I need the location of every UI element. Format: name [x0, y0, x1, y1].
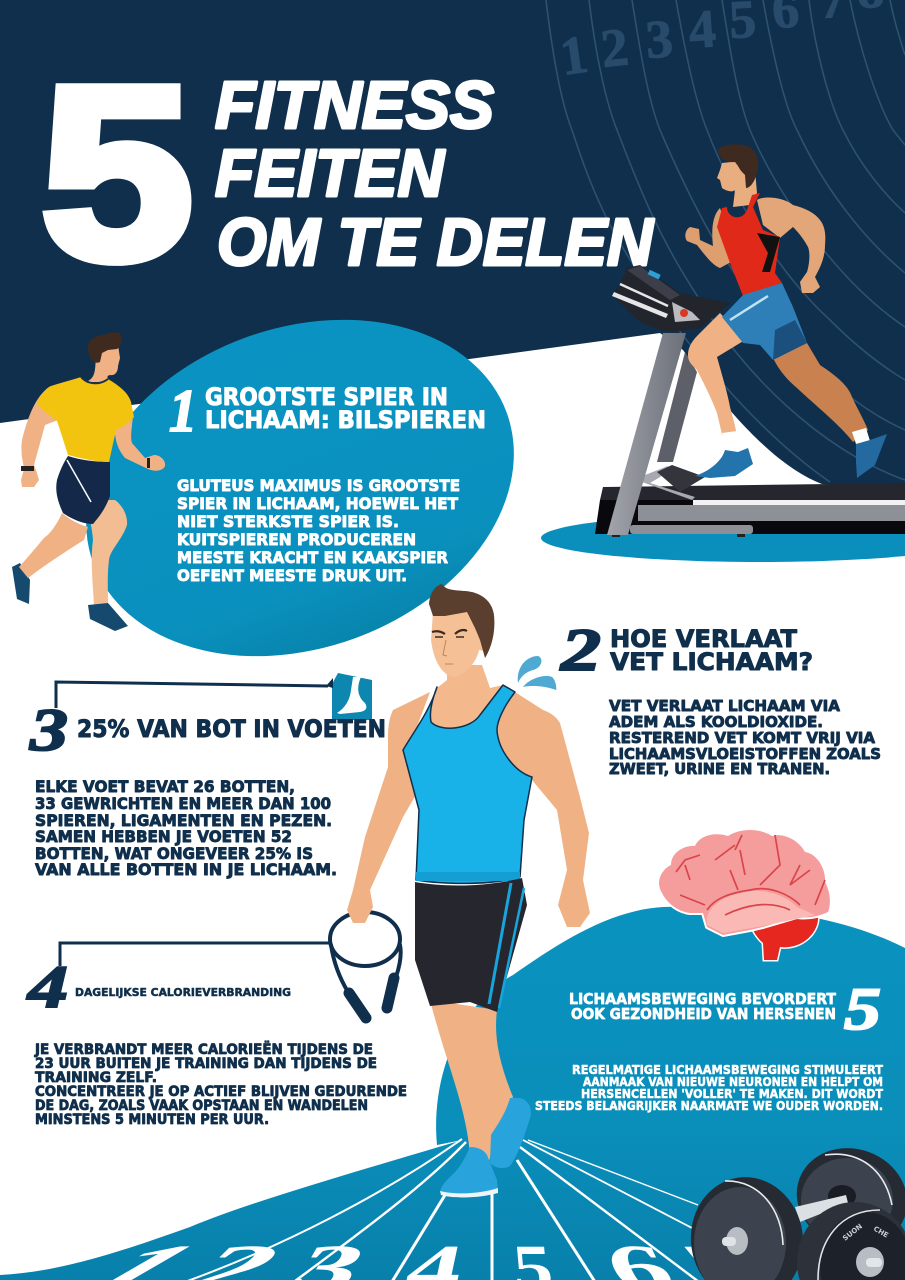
fact 1 body text: KUITSPIEREN PRODUCEREN	[177, 530, 416, 549]
runner in yellow shirt	[12, 332, 165, 631]
fact 5 heading: LICHAAMSBEWEGING BEVORDERT	[569, 990, 837, 1008]
front leg	[688, 313, 745, 437]
hair	[717, 144, 758, 188]
fact 5 body text: STEEDS BELANGRIJKER NAARMATE WE OUDER WORDEN.	[535, 1099, 883, 1113]
fact 4 body text: TRAINING ZELF.	[35, 1070, 157, 1086]
fact 2 heading: VET LICHAAM?	[610, 648, 813, 676]
decorative lane numbers in header: 4	[687, 0, 718, 60]
yellow t-shirt	[37, 377, 134, 462]
fact 1 heading: GROOTSTE SPIER IN	[205, 383, 448, 411]
cerebrum	[659, 830, 830, 935]
fact 1 body text: MEESTE KRACHT EN KAAKSPIER	[177, 548, 448, 567]
head and neck	[717, 160, 757, 207]
left arm	[347, 692, 430, 923]
title: FITNESS FEITEN OM TE DELEN	[214, 80, 656, 267]
neck and chest	[425, 665, 503, 740]
treadmill rear upright	[657, 352, 697, 462]
fact 2 body text: RESTEREND VET KOMT VRIJ VIA	[609, 729, 875, 747]
back leg	[19, 513, 88, 578]
fact 3 body text: ELKE VOET BEVAT 26 BOTTEN,	[35, 777, 295, 796]
fact 4 body text: DE DAG, ZOALS VAAK OPSTAAN EN WANDELEN	[35, 1098, 368, 1114]
back arm	[757, 198, 825, 293]
front arm	[685, 208, 731, 268]
black side panel	[757, 233, 780, 272]
fact 1 body text: GLUTEUS MAXIMUS IS GROOTSTE	[177, 476, 460, 495]
decorative lane numbers in header: 1	[556, 24, 591, 87]
icon: foot	[326, 673, 372, 720]
front shoe	[88, 603, 128, 631]
fact 2 body text: ADEM ALS KOOLDIOXIDE.	[609, 713, 823, 731]
fact 4 body text: 23 UUR BUITEN JE TRAINING DAN TIJDENS DE	[35, 1056, 377, 1072]
fact 5 body text: HERSENCELLEN 'VOLLER' TE MAKEN. DIT WORDT	[581, 1087, 884, 1101]
fact 1 heading	[205, 383, 486, 434]
right arm	[115, 415, 165, 471]
fact 3 body text: SAMEN HEBBEN JE VOETEN 52	[35, 827, 292, 846]
fact 4 heading: DAGELIJKSE CALORIEVERBRANDING	[75, 986, 291, 999]
treadmill front upright	[607, 333, 686, 535]
title: FITNESS FEITEN OM TE DELEN: FEITEN	[215, 136, 446, 211]
decorative running track lanes in header	[546, 0, 905, 482]
fact 5 body text	[535, 1063, 884, 1113]
fact 2 body text: VET VERLAAT LICHAAM VIA	[609, 697, 840, 715]
fact 1	[169, 378, 486, 585]
number 4: 4	[27, 954, 68, 1020]
number 5: 5	[844, 976, 881, 1042]
panel: blue ellipse under treadmill	[541, 522, 905, 562]
fact 5	[535, 976, 884, 1113]
treadmill console	[612, 265, 730, 331]
fact 3 body text: 33 GEWRICHTEN EN MEER DAN 100	[35, 794, 331, 813]
number 1: 1	[169, 378, 197, 444]
temporal lobe highlight	[707, 891, 815, 933]
decorative lane numbers in header	[562, 0, 883, 75]
title: big 5: 5	[41, 36, 193, 311]
icon: dumbbells	[683, 1133, 905, 1280]
treadmill deck	[595, 465, 905, 537]
cerebellum and brain stem	[750, 915, 818, 960]
connector line fact 4	[60, 943, 332, 966]
blue tank top	[403, 685, 532, 883]
front plate	[797, 1202, 905, 1280]
panel: blue lower right with running track	[0, 907, 905, 1280]
fact 4 body text: JE VERBRANDT MEER CALORIEËN TIJDENS DE	[34, 1041, 373, 1058]
neck and face	[88, 348, 120, 382]
treadmill	[595, 265, 905, 537]
facial features	[432, 630, 467, 664]
fact 3 body text: BOTTEN, WAT ONGEVEER 25% IS	[35, 844, 313, 863]
fact 1 heading: LICHAAM: BILSPIEREN	[205, 406, 486, 434]
fact 2 body text: ZWEET, URINE EN TRANEN.	[609, 760, 830, 778]
fact 3	[29, 673, 386, 879]
front leg	[88, 500, 127, 606]
title: FITNESS FEITEN OM TE DELEN: OM TE DELEN	[217, 205, 655, 280]
fact 3 heading: 25% VAN BOT IN VOETEN	[77, 715, 386, 743]
hair	[88, 332, 122, 363]
blue shorts	[722, 283, 807, 360]
fact 4 body text: CONCENTREER JE OP ACTIEF BLIJVEN GEDURENDE	[35, 1084, 407, 1100]
track lane lines	[162, 1139, 703, 1280]
plate lettering: CHE	[872, 1225, 890, 1240]
title: FITNESS FEITEN OM TE DELEN: FITNESS	[215, 68, 494, 143]
icon: sweat drops	[518, 656, 556, 690]
fact 2 heading: HOE VERLAAT	[610, 625, 798, 653]
plate lettering: SUON	[841, 1222, 864, 1243]
fact 1 body text: NIET STERKSTE SPIER IS.	[177, 512, 399, 531]
fact 1 body text: OEFENT MEESTE DRUK UIT.	[177, 566, 407, 585]
black shorts	[415, 878, 527, 1012]
central man	[347, 584, 590, 1197]
fact 5 heading: OOK GEZONDHEID VAN HERSENEN	[571, 1005, 836, 1023]
fact 1 body text: SPIER IN LICHAAM, HOEWEL HET	[177, 494, 458, 513]
panel: navy header background	[0, 0, 905, 490]
bar	[795, 1195, 848, 1222]
fact 3 body text: VAN ALLE BOTTEN IN JE LICHAAM.	[35, 860, 337, 879]
hair	[429, 584, 494, 658]
fact 2 body text: LICHAAMSVLOEISTOFFEN ZOALS	[609, 745, 881, 763]
decorative lane numbers in header: 2	[598, 16, 631, 79]
icon: jump rope	[330, 912, 401, 1018]
panel: blue blob fact 1	[86, 320, 514, 656]
fact 5 heading	[569, 990, 837, 1023]
legs	[430, 1000, 513, 1162]
socks	[722, 428, 870, 444]
number 3: 3	[29, 697, 68, 763]
face	[431, 612, 488, 677]
fact 1 body text	[177, 476, 460, 585]
runner on treadmill	[685, 144, 887, 478]
fact 3 body text	[35, 777, 337, 879]
back leg	[773, 343, 868, 442]
number 2: 2	[560, 617, 601, 683]
fact 4	[27, 912, 407, 1128]
fact 4 body text	[34, 1041, 407, 1128]
plate lettering	[841, 1222, 890, 1243]
fact 4 body text: MINSTENS 5 MINUTEN PER UUR.	[35, 1112, 269, 1128]
brain folds	[676, 835, 825, 915]
track lane numbers	[113, 1246, 694, 1280]
rear plate	[783, 1133, 905, 1263]
icon: brain	[659, 830, 830, 960]
red tank top	[717, 193, 782, 296]
navy shorts	[56, 456, 110, 524]
shoes	[695, 448, 753, 478]
fact 5 body text: REGELMATIGE LICHAAMSBEWEGING STIMULEERT	[572, 1063, 884, 1077]
fact 2	[560, 617, 881, 778]
back shoe	[12, 563, 30, 604]
left plate	[683, 1170, 811, 1280]
fact 3 body text: SPIEREN, LIGAMENTEN EN PEZEN.	[35, 811, 332, 830]
fact 2 body text	[609, 697, 881, 778]
right arm	[495, 692, 590, 927]
shoes	[440, 1098, 531, 1197]
decorative lane numbers in header: 3	[644, 8, 675, 70]
connector line fact 3	[56, 682, 328, 708]
fact 2 heading	[610, 625, 813, 676]
left arm	[21, 386, 58, 487]
